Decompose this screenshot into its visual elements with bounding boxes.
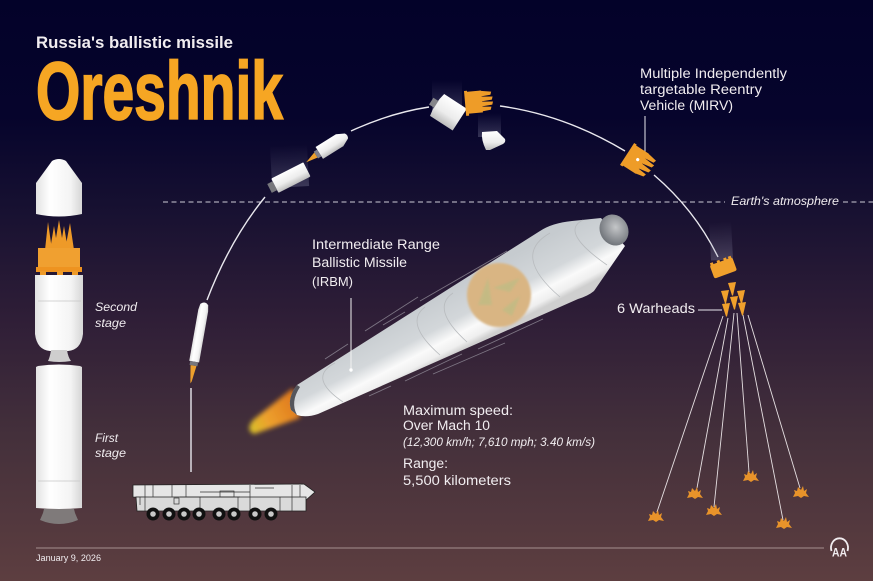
second stage: [35, 275, 83, 351]
launcher truck: [133, 484, 315, 520]
atmosphere label: Earth's atmosphere: [731, 196, 839, 208]
discarded nose fairing: [478, 113, 505, 150]
warheads leader: [698, 309, 722, 311]
trajectory arc: [191, 106, 718, 472]
IRBM label: Ballistic Missile: [312, 255, 407, 270]
subtitle: Russia's ballistic missile: [36, 33, 233, 52]
nose fairing: [36, 159, 82, 216]
second stage label: Second: [95, 302, 138, 314]
IRBM label: Intermediate Range: [312, 237, 440, 252]
warheads: [721, 282, 746, 316]
MIRV label: Multiple Independently: [640, 66, 787, 81]
warhead trajectories: [657, 313, 800, 520]
specifications: Range:: [403, 456, 448, 471]
orange warhead bus, upper: [464, 89, 494, 116]
missile body: [290, 218, 625, 416]
first stage nozzle: [40, 509, 78, 524]
second stage label: stage: [95, 318, 126, 330]
MIRV vehicle: [620, 143, 658, 181]
impact explosions: [648, 470, 809, 529]
MIRV leader: [644, 116, 646, 160]
title: Oreshnik: [36, 46, 283, 137]
main missile illustration: [249, 209, 634, 434]
second stage in flight: [302, 130, 351, 167]
MIRV label: Vehicle (MIRV): [640, 98, 733, 113]
discarded first stage: [266, 144, 311, 196]
warhead cutaway: [467, 263, 531, 327]
speed lines: [325, 251, 543, 396]
specifications: Maximum speed:: [403, 403, 513, 418]
launched rocket: [185, 302, 210, 384]
empty MIRV bus: [709, 221, 737, 279]
date: January 9, 2026: [36, 553, 101, 564]
AA logo: [831, 538, 848, 560]
IRBM label: [312, 237, 440, 289]
engine ring: [290, 385, 300, 415]
atmosphere line: [163, 201, 873, 203]
IRBM label: (IRBM): [312, 274, 353, 289]
exhaust flame: [249, 388, 300, 434]
section seams: [323, 220, 607, 402]
MIRV label: [640, 66, 787, 113]
specifications: [403, 403, 595, 488]
specifications: 5,500 kilometers: [403, 473, 511, 488]
footer rule: [36, 547, 824, 549]
AA logo: AA: [832, 548, 847, 560]
MIRV label: targetable Reentry: [640, 82, 762, 97]
warhead stage: [36, 220, 82, 275]
first stage label: stage: [95, 448, 126, 460]
first stage label: [95, 433, 126, 460]
specifications: (12,300 km/h; 7,610 mph; 3.40 km/s): [403, 437, 595, 449]
nose tip: [594, 209, 634, 251]
specifications: Over Mach 10: [403, 418, 490, 433]
second stage nozzle: [48, 350, 71, 362]
discarded second stage: [424, 80, 467, 131]
first stage: [36, 364, 82, 509]
warheads label: 6 Warheads: [617, 301, 695, 316]
IRBM leader: [349, 298, 353, 372]
first stage label: First: [95, 433, 119, 445]
exploded missile stack: [35, 159, 83, 524]
second stage label: [95, 302, 138, 330]
